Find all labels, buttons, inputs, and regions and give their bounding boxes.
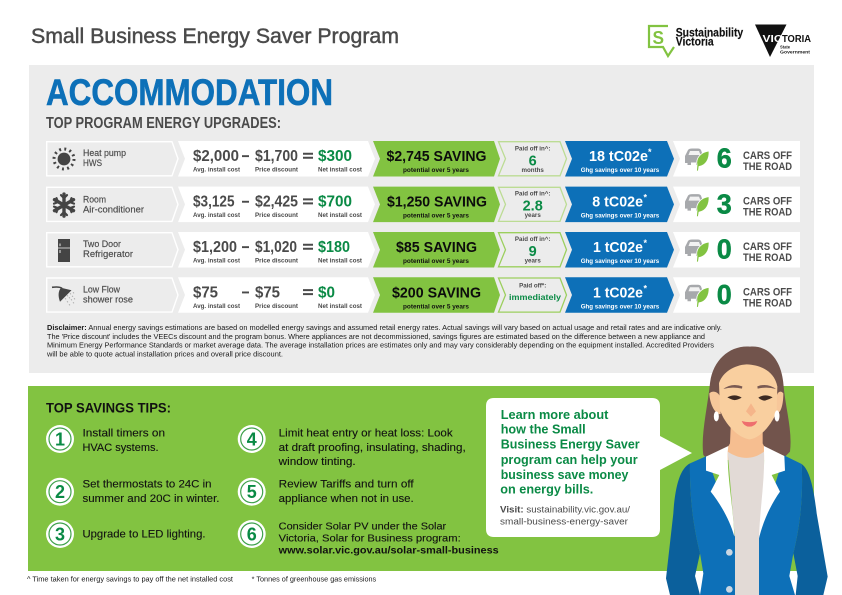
row: heat pump HWS: Heat pump bbox=[83, 148, 126, 158]
heading: top savings tips: TOP SAVINGS TIPS: bbox=[46, 400, 171, 416]
row: heat pump HWS: $2,745 SAVING bbox=[386, 148, 486, 165]
footnote: greenhouse gas: * Tonnes of greenhouse gas emissions bbox=[252, 577, 377, 584]
row: two door refrigerator: $180 bbox=[318, 239, 350, 256]
row: low flow shower rose: CARS OFF bbox=[743, 286, 792, 298]
row: room air-conditioner: $3,125 bbox=[193, 194, 235, 211]
row: heat pump HWS: THE ROAD bbox=[743, 161, 792, 173]
logo: Sustainability Victoria: Victoria bbox=[676, 37, 714, 49]
row: low flow shower rose: $75 bbox=[193, 284, 218, 301]
tip 4: Limit heat entry or heat loss: Look bbox=[279, 428, 453, 440]
tip 4: 4 bbox=[247, 430, 257, 450]
tip 5: 5 bbox=[247, 482, 257, 502]
logo: Victoria State Government: VIC bbox=[762, 33, 783, 45]
row: heat pump HWS: 6 bbox=[529, 153, 537, 169]
panel: top savings tips bbox=[28, 386, 814, 571]
footnote: paid off time: ^ Time taken for energy savings to pay off the net installed cost bbox=[27, 577, 233, 584]
shirt bbox=[728, 452, 765, 595]
tip 6: Consider Solar PV under the Solar bbox=[279, 520, 447, 532]
tip 5: appliance when not in use. bbox=[279, 493, 414, 505]
row: two door refrigerator bbox=[47, 232, 800, 268]
row: heat pump HWS: $300 bbox=[318, 148, 352, 165]
tip 4 bbox=[238, 425, 466, 468]
row: heat pump HWS: HWS bbox=[83, 158, 102, 168]
logo: Victoria State Government: State bbox=[780, 45, 791, 50]
tip 2 bbox=[46, 478, 219, 506]
row: heat pump HWS bbox=[47, 141, 800, 176]
tip 3: 3 bbox=[55, 524, 65, 544]
row: room air-conditioner: $1,250 SAVING bbox=[387, 194, 487, 211]
row: two door refrigerator: * bbox=[644, 238, 648, 248]
row: low flow shower rose: potential over 5 years bbox=[403, 303, 469, 310]
tip 1 bbox=[46, 425, 165, 454]
callout: learn more speech bubble: business save money bbox=[501, 467, 629, 482]
row: low flow shower rose: 0 bbox=[717, 279, 732, 310]
illustration: businesswoman bbox=[666, 347, 828, 595]
icon: car with leaf bbox=[685, 285, 709, 307]
tip 2: summer and 20C in winter. bbox=[82, 493, 219, 505]
row: low flow shower rose: 1 tC02e bbox=[593, 284, 643, 301]
row: two door refrigerator: years bbox=[525, 258, 541, 265]
jacket right body bbox=[759, 455, 802, 595]
row: room air-conditioner: CARS OFF bbox=[743, 196, 792, 208]
row: two door refrigerator: $1,200 bbox=[193, 239, 237, 256]
right sleeve bbox=[793, 464, 828, 595]
heading: accommodation: ACCOMMODATION bbox=[46, 71, 333, 113]
row: heat pump HWS: * bbox=[648, 147, 652, 157]
callout: learn more speech bubble: Business Energy Saver bbox=[501, 437, 640, 452]
title: Small Business Energy Saver Program bbox=[31, 25, 399, 48]
row: room air-conditioner: Ghg savings over 10 years bbox=[581, 213, 660, 220]
row: two door refrigerator: Avg. install cost bbox=[193, 258, 241, 265]
row: room air-conditioner: 2.8 bbox=[523, 199, 543, 215]
disclaimer: will be able to quote actual installation prices and overall price discount. bbox=[46, 351, 283, 358]
row: low flow shower rose: Avg. install cost bbox=[193, 303, 241, 310]
tip 1: HVAC systems. bbox=[82, 442, 158, 454]
row: two door refrigerator: potential over 5 years bbox=[403, 258, 469, 265]
row: room air-conditioner: * bbox=[644, 193, 648, 203]
row: low flow shower rose: $75 bbox=[255, 284, 280, 301]
row: two door refrigerator: Ghg savings over 10 years bbox=[581, 258, 660, 265]
row: two door refrigerator: $85 SAVING bbox=[396, 239, 477, 256]
face bbox=[719, 364, 777, 439]
row: heat pump HWS: Avg. install cost bbox=[193, 167, 241, 174]
panel: top program energy upgrades bbox=[29, 65, 814, 373]
logo: Victoria State Government: TORIA bbox=[782, 33, 811, 45]
tip 6: 6 bbox=[247, 524, 257, 544]
row: low flow shower rose: Net install cost bbox=[318, 303, 363, 310]
row: two door refrigerator: Paid off in^: bbox=[515, 236, 550, 243]
tip 5: Review Tariffs and turn off bbox=[279, 479, 415, 491]
ears bbox=[709, 392, 783, 414]
tip 2: Set thermostats to 24C in bbox=[82, 479, 212, 491]
logo: Sustainability Victoria bbox=[649, 26, 744, 56]
row: heat pump HWS: Net install cost bbox=[318, 167, 363, 174]
row: heat pump HWS: 18 tC02e bbox=[589, 148, 648, 165]
row: heat pump HWS: $2,000 bbox=[193, 148, 239, 165]
row: heat pump HWS: months bbox=[522, 167, 544, 174]
right lapel bbox=[759, 446, 785, 538]
row: low flow shower rose: $0 bbox=[318, 284, 335, 301]
tip 6: Victoria, Solar for Business program: bbox=[279, 532, 461, 544]
tip 3 bbox=[46, 520, 206, 548]
row: room air-conditioner: $700 bbox=[318, 194, 352, 211]
callout: learn more speech bubble: how the Small bbox=[501, 422, 586, 437]
row: low flow shower rose: $200 SAVING bbox=[392, 284, 481, 301]
row: room air-conditioner: $2,425 bbox=[255, 194, 298, 211]
tip 5 bbox=[238, 478, 415, 506]
row: room air-conditioner: Price discount bbox=[255, 212, 299, 219]
icon: refrigerator bbox=[58, 239, 70, 262]
row: two door refrigerator: Net install cost bbox=[318, 258, 363, 265]
row: low flow shower rose: THE ROAD bbox=[743, 297, 792, 309]
disclaimer: Minimum Energy Performance Standards or market average data. The average installation prices are estimates only and may vary considerably depending on the equipment installed. Accredited Providers bbox=[47, 343, 715, 350]
logo: Victoria State Government: Government bbox=[780, 49, 811, 54]
row: heat pump HWS: potential over 5 years bbox=[403, 167, 469, 174]
neck bbox=[726, 427, 766, 460]
eyes bbox=[727, 395, 773, 401]
subheading: top program energy upgrades: TOP PROGRAM ENERGY UPGRADES: bbox=[46, 115, 281, 132]
icon: car with leaf bbox=[685, 240, 709, 262]
icon: car with leaf bbox=[685, 148, 709, 171]
row: two door refrigerator: $1,020 bbox=[255, 239, 297, 256]
jacket left body bbox=[690, 456, 735, 595]
earrings bbox=[714, 411, 719, 421]
callout: learn more speech bubble bbox=[486, 398, 692, 537]
row: two door refrigerator: Price discount bbox=[255, 258, 299, 265]
tip 2: 2 bbox=[55, 482, 65, 502]
logo: Sustainability Victoria: Sustainability bbox=[676, 27, 744, 39]
callout: learn more speech bubble: on energy bills. bbox=[500, 482, 593, 497]
row: low flow shower rose: * bbox=[644, 283, 648, 293]
tip 6: www.solar.vic.gov.au/solar-small-business bbox=[278, 544, 499, 556]
jacket buttons bbox=[726, 549, 733, 593]
row: room air-conditioner: Air-conditioner bbox=[83, 205, 144, 215]
icon: shower head bbox=[52, 287, 75, 305]
row: two door refrigerator: Two Door bbox=[83, 239, 121, 249]
row: low flow shower rose: immediately bbox=[509, 292, 561, 302]
row: room air-conditioner: years bbox=[525, 212, 541, 219]
disclaimer bbox=[46, 325, 722, 358]
left lapel bbox=[706, 446, 734, 537]
row: low flow shower rose: Ghg savings over 10 years bbox=[581, 303, 660, 310]
tip 1: 1 bbox=[55, 430, 65, 450]
tip 4: window tinting. bbox=[278, 456, 356, 468]
row: room air-conditioner: Room bbox=[83, 195, 106, 205]
tip 4: at draft proofing, insulating, shading, bbox=[279, 442, 466, 454]
tip 6 bbox=[238, 520, 499, 556]
nose bbox=[746, 403, 756, 417]
row: two door refrigerator: THE ROAD bbox=[743, 252, 792, 264]
row: room air-conditioner: Avg. install cost bbox=[193, 212, 241, 219]
callout: learn more speech bubble: small-business-energy-saver bbox=[500, 516, 628, 526]
row: two door refrigerator: Refrigerator bbox=[83, 249, 133, 259]
left sleeve bbox=[666, 463, 700, 595]
row: room air-conditioner: Paid off in^: bbox=[515, 190, 550, 197]
row: low flow shower rose: Paid off*: bbox=[519, 282, 546, 289]
row: heat pump HWS: CARS OFF bbox=[743, 150, 792, 162]
row: room air-conditioner: 3 bbox=[717, 188, 732, 219]
row: heat pump HWS: $1,700 bbox=[255, 148, 298, 165]
row: room air-conditioner: THE ROAD bbox=[743, 207, 792, 219]
callout: learn more speech bubble: Learn more about bbox=[501, 407, 609, 422]
row: room air-conditioner: potential over 5 years bbox=[403, 213, 469, 220]
eyebrows bbox=[723, 385, 776, 389]
row: low flow shower rose: Low Flow bbox=[83, 284, 121, 294]
row: low flow shower rose bbox=[47, 277, 800, 313]
tip 3: Upgrade to LED lighting. bbox=[82, 529, 206, 541]
callout: learn more speech bubble: Visit: sustainability.vic.gov.au/ bbox=[500, 505, 631, 515]
icon: car with leaf bbox=[685, 194, 709, 217]
row: heat pump HWS: Ghg savings over 10 years bbox=[581, 167, 660, 174]
row: heat pump HWS: Paid off in^: bbox=[515, 146, 550, 152]
row: low flow shower rose: Price discount bbox=[255, 303, 299, 310]
callout: learn more speech bubble: program can help your bbox=[501, 452, 638, 467]
disclaimer: Disclaimer: Annual energy savings estimations are based on modelled energy savings and assumed retail energy rates. Actual savings will vary based on actual usage and retail rates and are indicative only. bbox=[47, 325, 722, 332]
tip 1: Install timers on bbox=[82, 428, 165, 440]
row: room air-conditioner bbox=[47, 187, 800, 222]
row: heat pump HWS: Price discount bbox=[255, 167, 299, 174]
disclaimer: The 'Price discount' includes the VEECs discount and the program bonus. Where appliances are not decommissioned, savings figures are estimated based on the difference between a new appliance and bbox=[47, 334, 705, 341]
icon: sun bbox=[54, 149, 74, 169]
row: heat pump HWS: 6 bbox=[717, 143, 732, 174]
row: low flow shower rose: shower rose bbox=[83, 295, 133, 305]
row: two door refrigerator: 9 bbox=[529, 244, 537, 260]
row: room air-conditioner: 8 tC02e bbox=[592, 194, 643, 211]
row: two door refrigerator: CARS OFF bbox=[743, 241, 792, 253]
mouth bbox=[742, 421, 757, 427]
logo: Victoria State Government bbox=[755, 24, 811, 57]
row: two door refrigerator: 0 bbox=[717, 234, 732, 265]
row: two door refrigerator: 1 tC02e bbox=[593, 239, 643, 256]
hair bbox=[703, 347, 791, 458]
icon: snowflake bbox=[54, 194, 74, 216]
row: room air-conditioner: Net install cost bbox=[318, 212, 363, 219]
logo: Sustainability Victoria: S bbox=[652, 28, 664, 48]
